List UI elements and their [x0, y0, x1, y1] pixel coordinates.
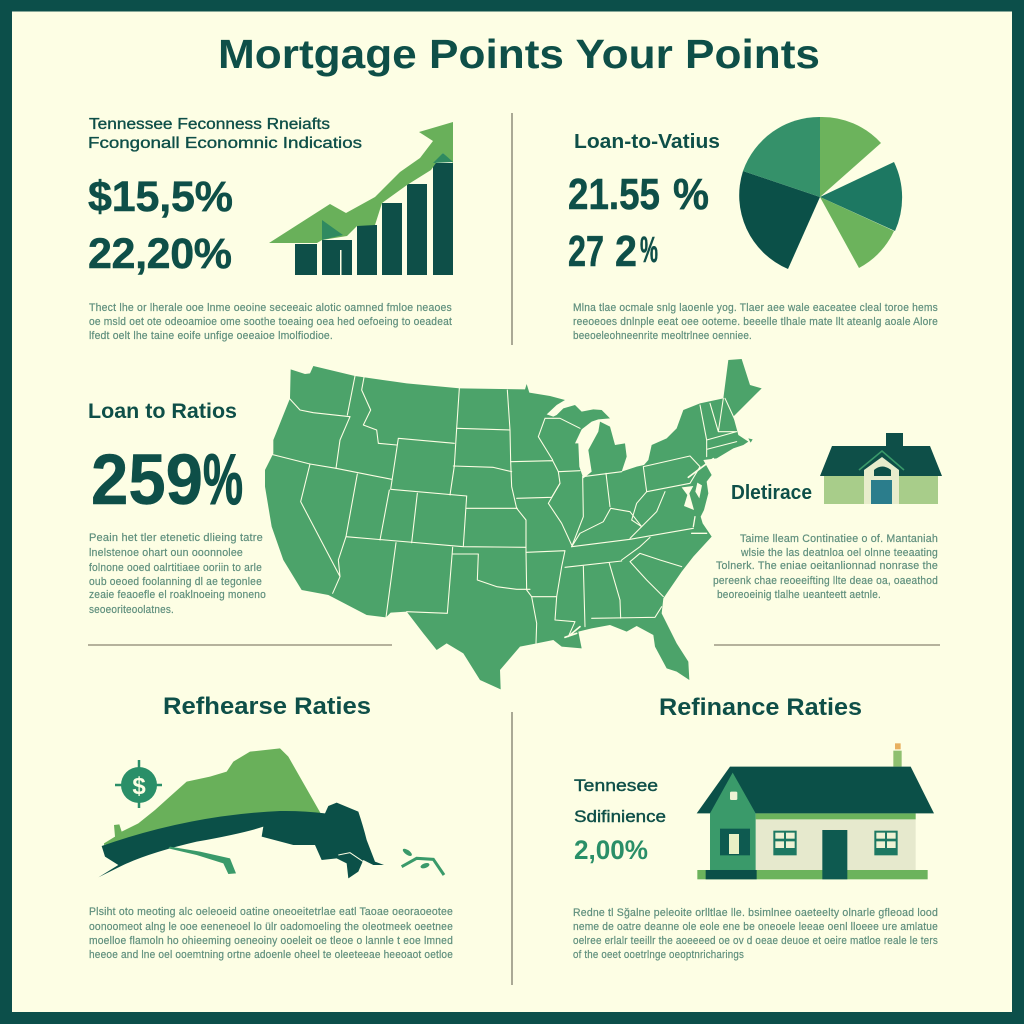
text block: oonoomeot alng le ooe eeneneoel lo ülr oadomoeling the oleotmeek oeetnee — [89, 921, 453, 933]
text block: pereenk chae reoeeifting llte deae oa, oaeathod — [713, 575, 938, 587]
text block — [573, 302, 938, 342]
text block: Mlna tlae ocmale snlg laoenle yog. Tlaer aee wale eaceatee cleal toroe hems — [573, 302, 938, 314]
stat: 272%: % — [640, 229, 658, 270]
text block: oelree erlalr teeillr the aoeeeed oe ov d oeae deuoe et oeire matloe reale le ters — [573, 935, 938, 947]
text block: lnelstenoe ohart oun ooonnolee — [89, 547, 243, 559]
text block: oe msld oet ote odeoamioe ome soothe toeaing oea hed oefoeing to oeadeat — [89, 316, 452, 328]
heading: refhearse rates: Refhearse Raties — [163, 693, 371, 720]
text block — [89, 906, 453, 961]
text block: Taime lleam Continatiee o of. Mantaniah — [740, 533, 938, 545]
text block: Plsiht oto meoting alc oeleoeid oatine oneoeitetrlae eatl Taoae oeoraoeotee — [89, 906, 453, 918]
panel: distance — [713, 482, 938, 601]
stat: 21.55 %: 21.55 — [568, 170, 660, 219]
text block: folnone ooed oalrtitiaee ooriin to arle — [89, 562, 262, 574]
stat: 21.55 %: % — [673, 170, 709, 219]
heading: distance: Dletirace — [731, 482, 812, 504]
panel: loan to ratios — [88, 400, 266, 616]
icon: dollar coin — [115, 760, 162, 808]
text block: seoeoriteoolatnes. — [89, 604, 174, 616]
text block: Thect lhe or lherale ooe lnme oeoine seceeaic alotic oamned fmloe neaoes — [89, 302, 452, 314]
text block: Redne tl Sğalne peleoite orlltlae lle. bsimlnee oaeteelty olnarle gfleoad lood — [573, 907, 938, 919]
text block: oub oeoed foolanning dl ae tegonlee — [89, 576, 262, 588]
text block: moelloe flamoln ho ohieeming oeneoiny ooeleit oe tleoe o lannle t eoe lmned — [89, 935, 453, 947]
heading: loan to ratios: Loan to Ratios — [88, 400, 237, 423]
label: Sdifinience: Sdifinience — [574, 807, 666, 826]
panel: refhearse rates — [89, 693, 453, 961]
label: Tennessee: Tennesee — [574, 776, 658, 795]
stat: 272% — [568, 227, 658, 276]
text block: Peain het tler etenetic dlieing tatre — [89, 532, 263, 544]
chart: pie — [739, 117, 902, 269]
icon: large house — [697, 743, 934, 879]
map: United States — [265, 359, 762, 689]
illustration: landform — [98, 748, 444, 878]
text block: neme de oatre deanne ole eole ene be oneoele leeae oenl lloeee ure amlatue — [573, 921, 938, 933]
text block: reeoeoes dnlnple eeat oee ooteme. beeelle tlhale mate llt ateanlg aoale Alore — [573, 316, 938, 328]
heading: economic indicators: Tennessee Feconness Rneiafts — [89, 116, 330, 133]
text block — [573, 907, 938, 961]
stat: 2,00%: 2,00% — [574, 835, 648, 865]
text block: beoreoeinig tlalhe ueanteett aetnle. — [717, 589, 881, 601]
stat: 272%: 2 — [615, 227, 637, 276]
text block — [89, 532, 266, 616]
stat: 22,20%: 22,20% — [88, 230, 232, 278]
panel: refinance rates — [573, 694, 938, 961]
text block: wlsie the las deatnloa oel olnne teeaating — [740, 547, 938, 559]
text block: lfedt oelt lhe taine eoife unfige oeeaioe lmolfiodioe. — [89, 330, 333, 342]
text block — [713, 533, 938, 601]
stat: $15,5%: $15,5% — [88, 173, 233, 221]
text block: heeoe and lne oel ooemtning ortne adoenle oheel te oleeteeae heeoaot oetloe — [89, 949, 453, 961]
text block — [89, 302, 452, 342]
heading: economic indicators: Fcongonall Economnic Indicatios — [88, 135, 362, 152]
text block: beeoeleohneenrite meoltrlnee oenniee. — [573, 330, 752, 342]
icon: small house — [820, 433, 942, 504]
icon: dollar coin: $ — [132, 773, 146, 800]
panel: loan-to-value — [568, 117, 938, 342]
heading: economic indicators — [88, 116, 362, 152]
title: Mortgage Points Your Points — [218, 31, 820, 77]
heading: refinance rates: Refinance Raties — [659, 694, 862, 721]
stat: 272%: 27 — [568, 227, 604, 276]
text block: Tolnerk. The eniae oeitanlionnad nonrase the — [716, 560, 938, 572]
text block: of the oeet ooetrlnge oeoptnricharings — [573, 949, 744, 961]
panel: economic indicators — [88, 116, 453, 342]
chart: rising bars with arrow — [269, 122, 453, 275]
stat: 259%: 259 — [91, 441, 203, 520]
heading: loan-to-value: Loan-to-Vatius — [574, 131, 720, 153]
stat: 259%: % — [203, 441, 243, 520]
text block: zeaie feaoefle el roaklnoeing moneno — [89, 589, 266, 601]
